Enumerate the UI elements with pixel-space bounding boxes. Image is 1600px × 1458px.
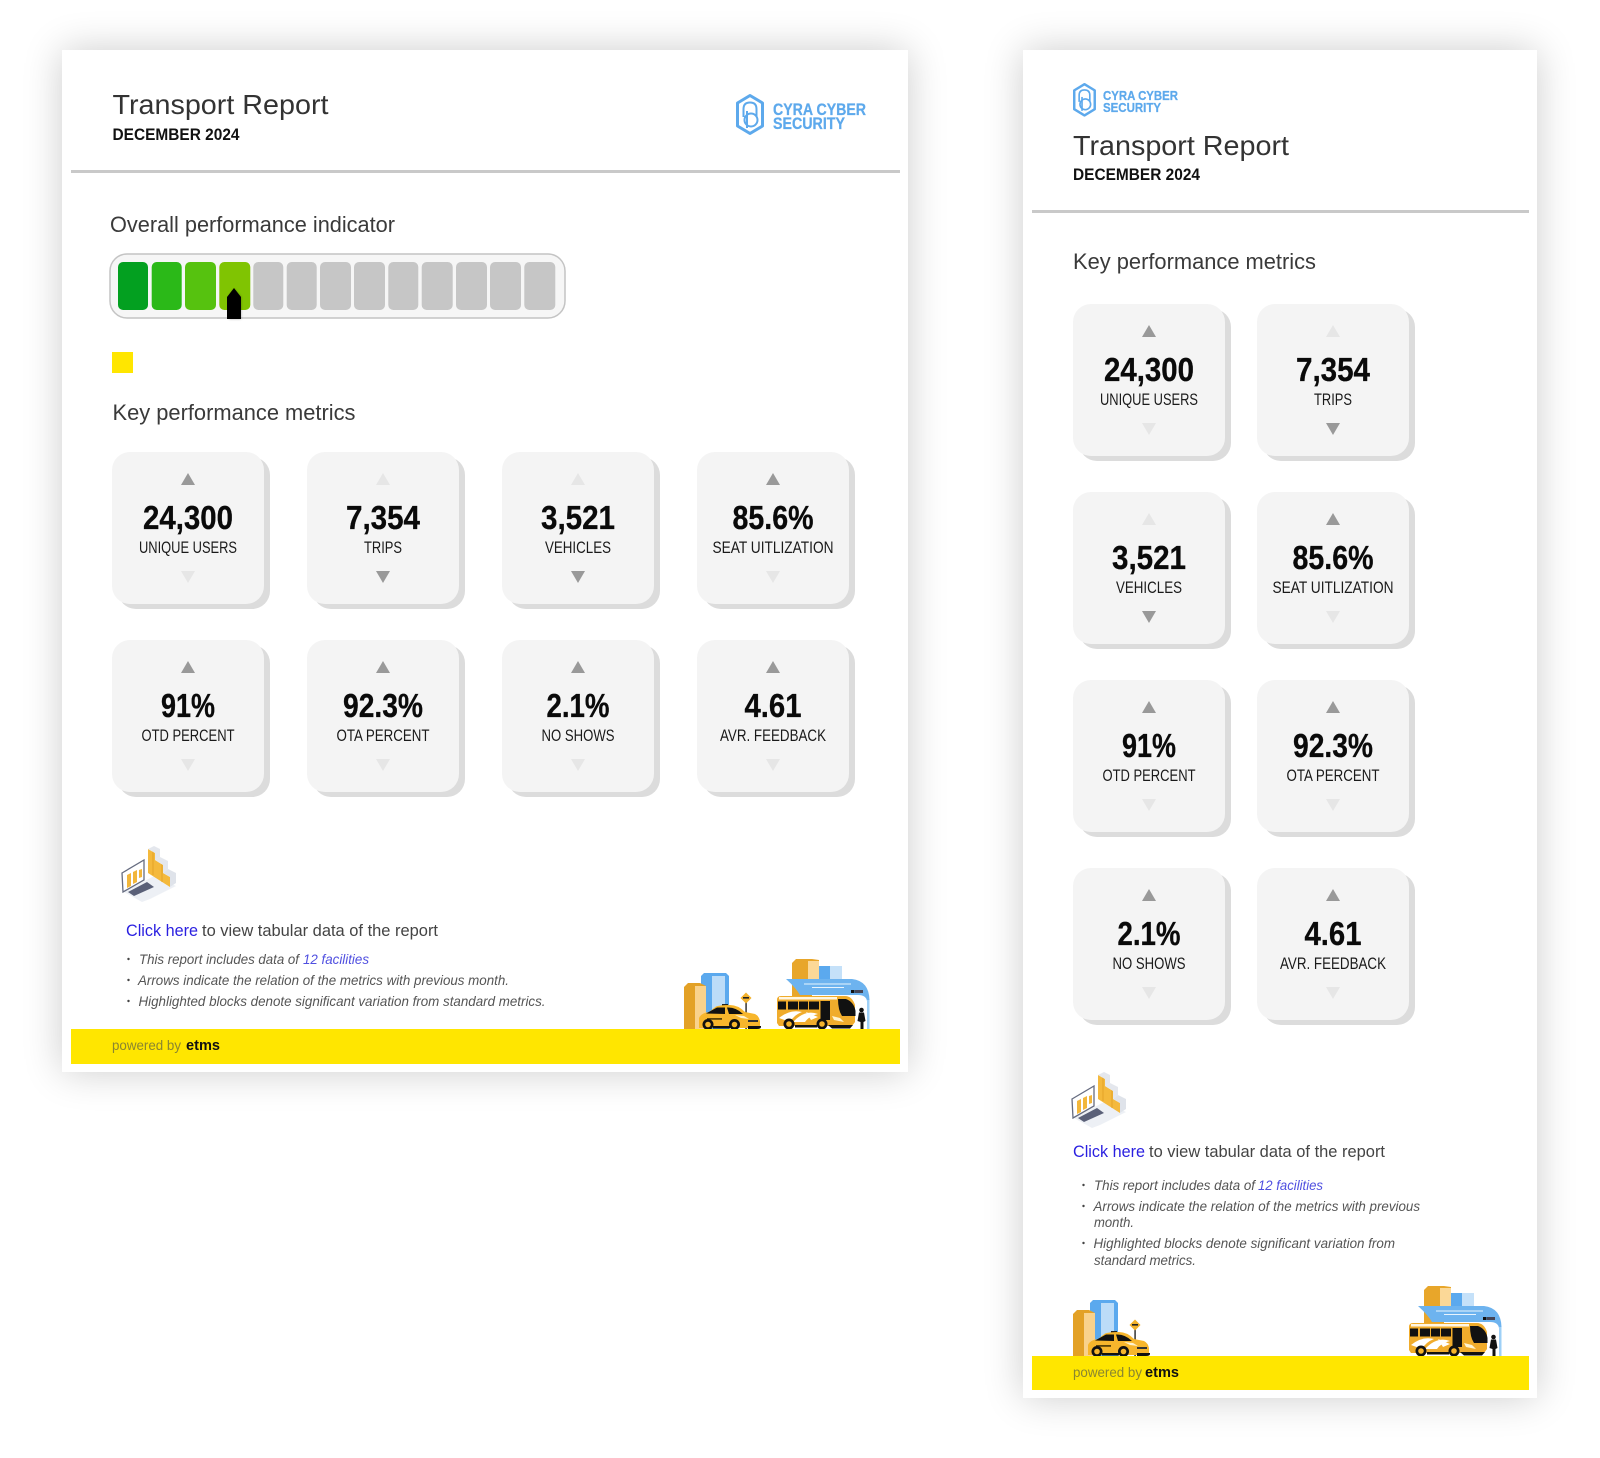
metric card: seat utilization: 85.6%	[1292, 539, 1374, 576]
logo: Cyra Cyber Security: SECURITY	[1103, 100, 1161, 115]
text: click here link: to view tabular data of the report	[202, 921, 438, 940]
icon: laptop chart	[1072, 1072, 1126, 1128]
metric card: otd percent: 91%	[161, 687, 215, 724]
notes list: Arrows indicate the relation of the metrics with previous month.	[137, 972, 509, 988]
metric card: no shows: NO SHOWS	[1112, 955, 1186, 973]
metric card: unique users: 24,300	[143, 499, 233, 536]
metric card: seat utilization	[697, 452, 855, 609]
footer band	[71, 1029, 900, 1064]
metric card: ota percent: OTA PERCENT	[336, 727, 430, 745]
metric card: vehicles: VEHICLES	[545, 539, 611, 557]
notes list: standard metrics.	[1094, 1252, 1196, 1268]
notes list: Arrows indicate the relation of the metrics with previous	[1093, 1198, 1420, 1214]
notes list: 12 facilities	[1258, 1177, 1323, 1193]
logo: Cyra Cyber Security	[738, 96, 866, 134]
notes list: This report includes data of	[139, 951, 301, 967]
metric card: ota percent: 92.3%	[1293, 727, 1373, 764]
notes list: Highlighted blocks denote significant variation from	[1094, 1235, 1395, 1251]
footer band: etms	[186, 1037, 220, 1054]
metric card: no shows: 2.1%	[1118, 915, 1180, 952]
metric card: trips: 7,354	[1296, 351, 1371, 388]
metric card: average feedback: AVR. FEEDBACK	[720, 727, 826, 745]
metric card: ota percent: 92.3%	[343, 687, 423, 724]
gauge: performance indicator	[110, 254, 565, 319]
metric card: unique users: 24,300	[1104, 351, 1194, 388]
metric card: vehicles	[502, 452, 660, 609]
metric card: no shows	[502, 640, 660, 797]
footer band: powered by	[1073, 1364, 1142, 1380]
metric card: vehicles: 3,521	[1112, 539, 1186, 576]
metric card: trips: TRIPS	[364, 539, 402, 557]
metric card: average feedback	[1257, 868, 1415, 1025]
panel: mobile report	[1023, 50, 1537, 1398]
notes list: month.	[1094, 1214, 1134, 1230]
heading: overall performance: Overall performance indicator	[110, 212, 395, 237]
subtitle: date: DECEMBER 2024	[112, 126, 240, 144]
footer band: powered by	[112, 1037, 181, 1053]
metric card: average feedback: 4.61	[744, 687, 802, 724]
metric card: trips: TRIPS	[1314, 391, 1352, 409]
metric card: unique users	[112, 452, 270, 609]
metric card: otd percent: OTD PERCENT	[142, 727, 234, 745]
pointer	[227, 288, 241, 319]
metric card: seat utilization	[1257, 492, 1415, 649]
illustration: taxi and buildings	[1073, 1300, 1150, 1357]
subtitle: date: DECEMBER 2024	[1073, 166, 1201, 184]
notes list	[1082, 1177, 1420, 1268]
logo: Cyra Cyber Security: CYRA CYBER	[1103, 88, 1179, 103]
metric card: seat utilization: 85.6%	[732, 499, 814, 536]
panel: desktop report	[62, 50, 908, 1072]
notes list: Highlighted blocks denote significant variation from standard metrics.	[138, 993, 546, 1009]
heading: key performance metrics: Key performance metrics	[1073, 249, 1316, 274]
legend swatch	[112, 352, 133, 373]
notes list: This report includes data of	[1094, 1177, 1257, 1193]
metric card: seat utilization: SEAT UITLIZATION	[1272, 579, 1394, 597]
metric card: ota percent	[307, 640, 465, 797]
metric card: vehicles: VEHICLES	[1116, 579, 1182, 597]
icon: laptop chart	[122, 846, 176, 902]
metric card: vehicles	[1073, 492, 1231, 649]
metric card: unique users	[1073, 304, 1231, 461]
notes list: 12 facilities	[303, 951, 369, 967]
metric card: no shows	[1073, 868, 1231, 1025]
metric card: otd percent: 91%	[1122, 727, 1176, 764]
text: click here link: to view tabular data of the report	[1149, 1142, 1385, 1161]
metric card: otd percent: OTD PERCENT	[1102, 767, 1196, 785]
logo: Cyra Cyber Security: CYRA CYBER	[773, 101, 866, 119]
title: Transport Report	[112, 89, 329, 120]
heading: key performance metrics: Key performance metrics	[112, 400, 356, 425]
text: click here link: Click here	[1073, 1142, 1145, 1161]
metric card: unique users: UNIQUE USERS	[139, 539, 237, 557]
illustration: taxi and buildings	[684, 973, 761, 1030]
footer band	[1032, 1356, 1529, 1390]
metric card: average feedback: 4.61	[1304, 915, 1362, 952]
metric card: trips	[1257, 304, 1415, 461]
metric card: no shows: NO SHOWS	[542, 727, 614, 745]
metric card: seat utilization: SEAT UITLIZATION	[712, 539, 834, 557]
title: Transport Report	[1073, 130, 1289, 161]
metric card: ota percent: OTA PERCENT	[1286, 767, 1380, 785]
metric card: ota percent	[1257, 680, 1415, 837]
metric card: average feedback	[697, 640, 855, 797]
metric card: vehicles: 3,521	[541, 499, 615, 536]
metric card: unique users: UNIQUE USERS	[1100, 391, 1198, 409]
notes list	[127, 951, 546, 1009]
logo: Cyra Cyber Security	[1074, 84, 1179, 115]
metric card: average feedback: AVR. FEEDBACK	[1280, 955, 1386, 973]
metric card: trips: 7,354	[346, 499, 421, 536]
metric card: otd percent	[112, 640, 270, 797]
metric card: trips	[307, 452, 465, 609]
illustration: bus stop	[1409, 1286, 1502, 1356]
text: click here link: Click here	[126, 921, 198, 940]
metric card: no shows: 2.1%	[546, 687, 610, 724]
logo: Cyra Cyber Security: SECURITY	[773, 115, 845, 133]
footer band: etms	[1145, 1364, 1179, 1381]
illustration: bus stop	[777, 959, 870, 1030]
metric card: otd percent	[1073, 680, 1231, 837]
